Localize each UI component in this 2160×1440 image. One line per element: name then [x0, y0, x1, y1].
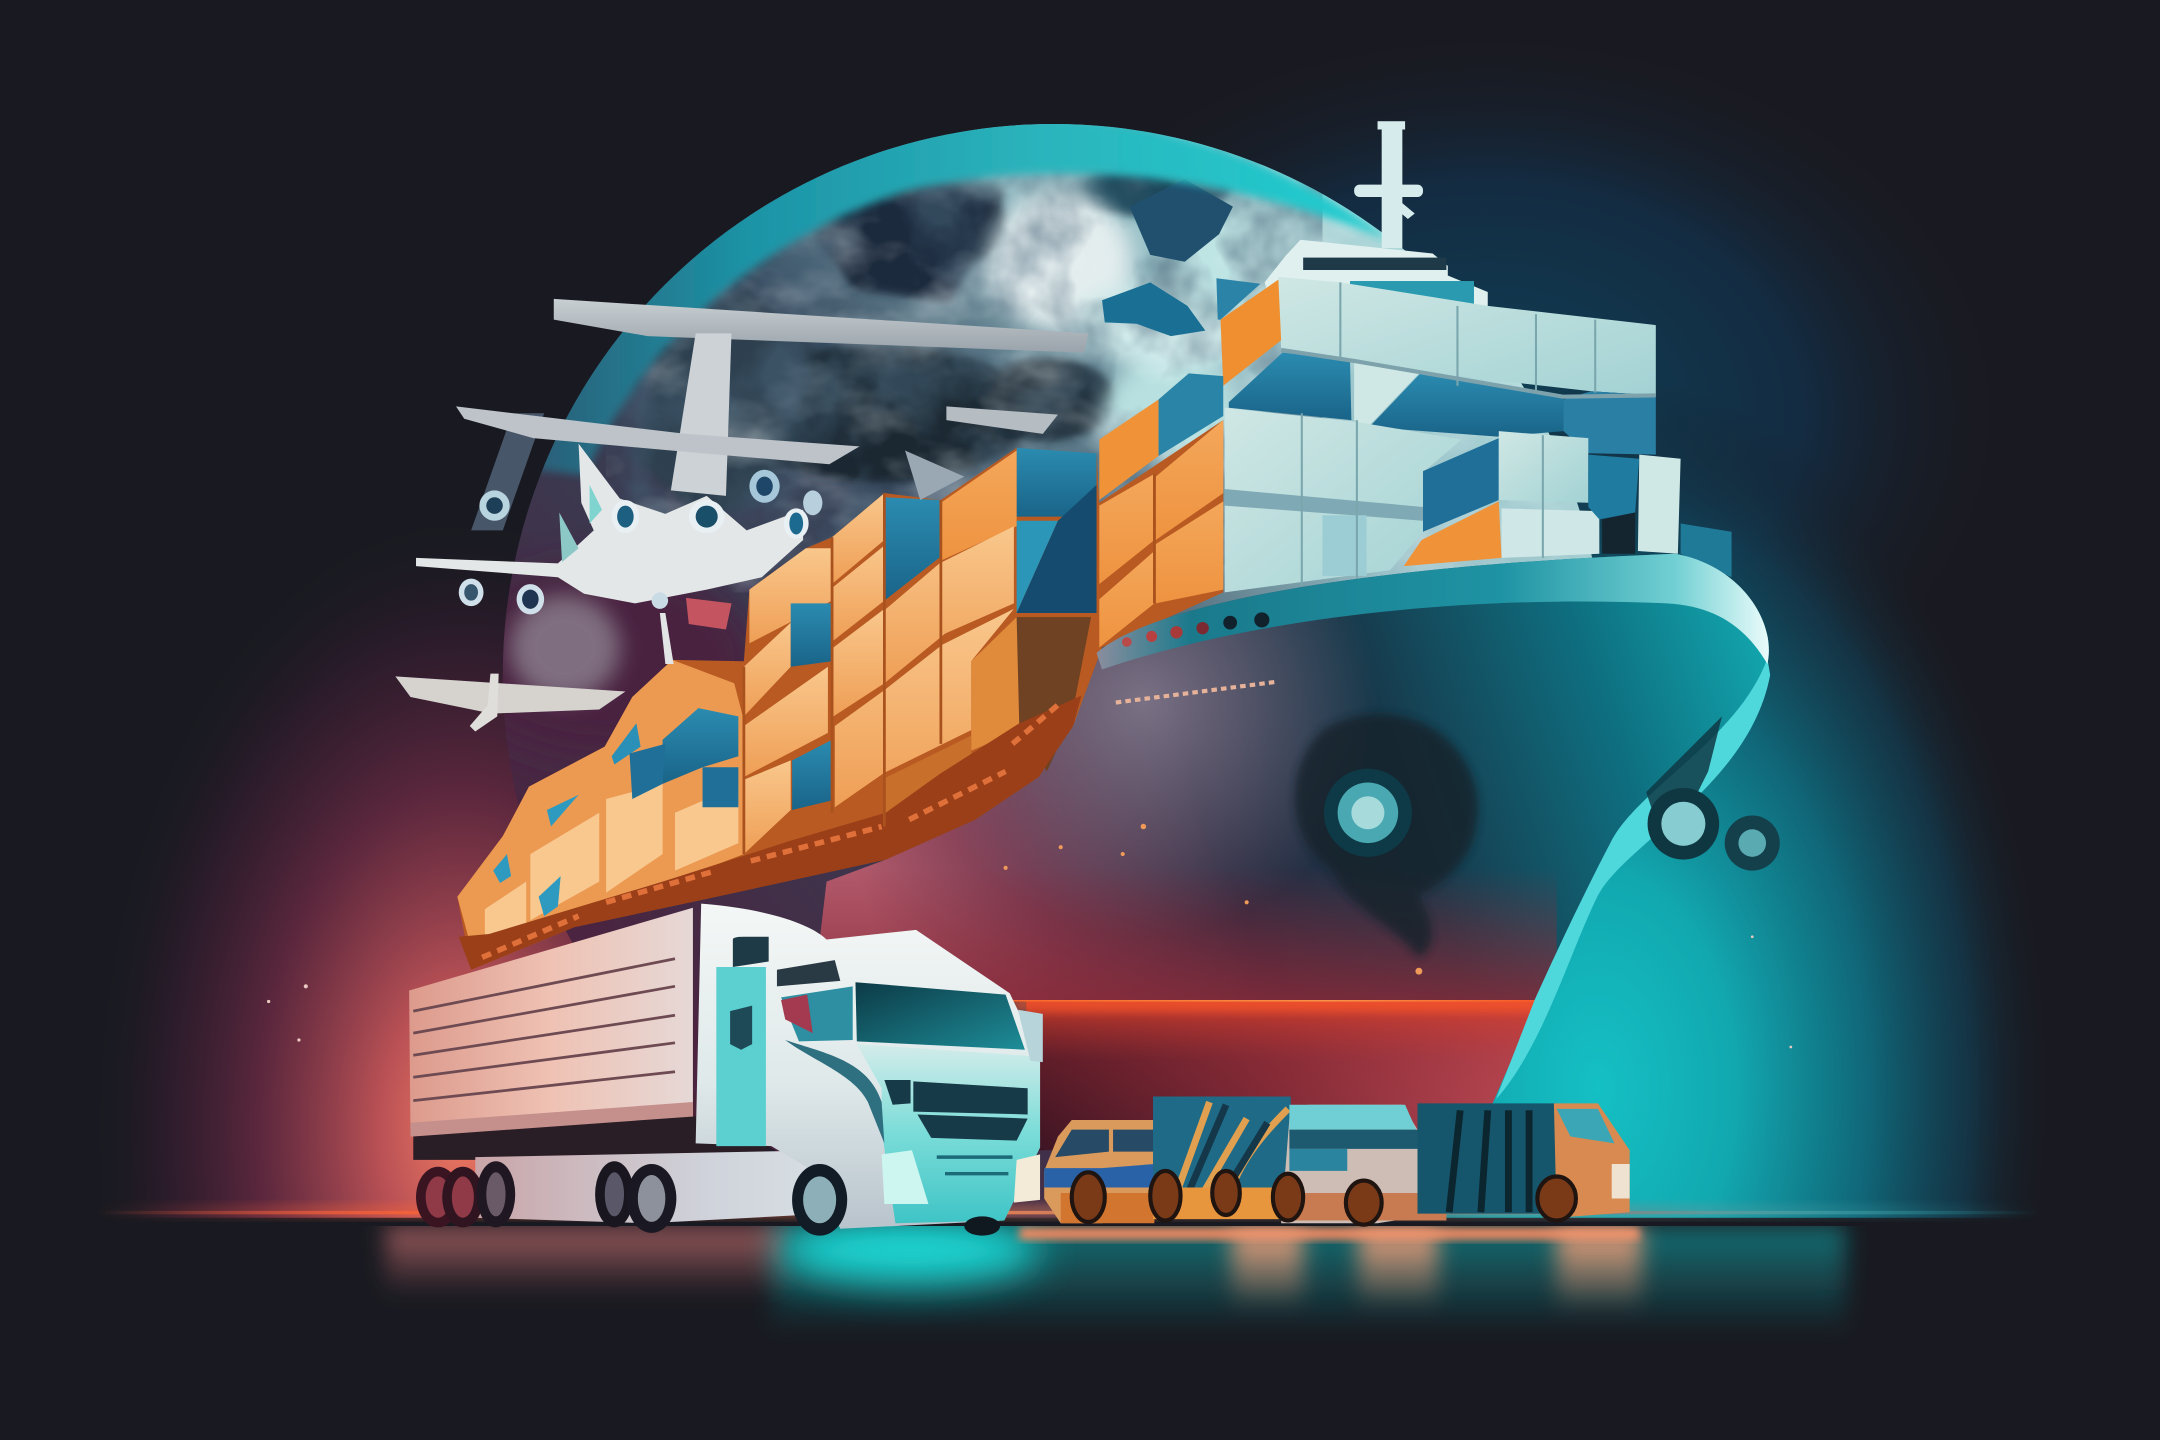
truck cab front: [857, 1044, 1040, 1223]
truck 2 container: [1153, 1097, 1302, 1219]
cargo dark base: [457, 420, 1223, 970]
plane wing right small: [946, 406, 1058, 434]
truck swoosh: [785, 1040, 884, 1143]
red glow left: [0, 0, 1240, 1223]
rear lower orange: [1099, 474, 1154, 584]
ship mast: [1354, 121, 1423, 248]
globe dark land masses: [640, 170, 1235, 512]
rear upper blue: [1159, 373, 1223, 456]
truck chassis silver: [475, 1150, 854, 1223]
big pale block: [1225, 408, 1462, 592]
hull sparks: [1004, 824, 1422, 975]
truck bumper slats: [937, 1157, 1012, 1174]
ground line: [96, 1204, 2039, 1218]
blue right block: [1564, 391, 1656, 455]
globe teal rim: [523, 115, 1391, 475]
globe dark texture: [623, 159, 1322, 565]
globe clouds: [943, 169, 1303, 470]
dark gap: [1602, 512, 1635, 554]
van 3: [1281, 1105, 1446, 1223]
blue glow behind ship: [0, 0, 2160, 882]
small wheels: [1072, 1171, 1576, 1225]
plane large wing top: [554, 299, 1088, 353]
hull body: [813, 544, 1791, 1006]
blue stack: [1017, 448, 1097, 517]
orange columns: [941, 450, 1017, 561]
top orange: [1221, 280, 1281, 386]
pale wedge: [1354, 361, 1422, 427]
front cargo mass: [457, 660, 744, 957]
truck side window: [781, 986, 853, 1041]
small trucks group: [1044, 1097, 1630, 1225]
truck windscreen: [855, 982, 1025, 1050]
scattered particles: [267, 935, 1792, 1048]
truck grille: [913, 1081, 1028, 1114]
truck trailer: [409, 908, 693, 1136]
van 1: [1044, 1120, 1157, 1223]
truck mirror: [1018, 1010, 1043, 1062]
hull portholes: [1116, 612, 1276, 703]
truck upper side window: [777, 960, 840, 986]
truck vents: [733, 937, 769, 967]
hull thruster right: [1646, 716, 1780, 871]
blue row: [1229, 353, 1351, 420]
truck 4 container: [1418, 1103, 1630, 1218]
pale block middle: [1499, 431, 1588, 503]
plane fuselage upper: [671, 333, 731, 496]
orange containers cargo: [457, 373, 1223, 970]
plane lower small: [395, 613, 674, 731]
reflection streaks: [1232, 1229, 1642, 1311]
red tag debris: [686, 598, 731, 630]
horizon glow line: [1012, 985, 1543, 1013]
truck: [409, 904, 1043, 1236]
globe: [455, 115, 1605, 1226]
bow bright edge: [1496, 658, 1770, 1099]
illustration: global logistics scene: [104, 104, 2027, 1324]
pale containers upper stack: [1216, 277, 1732, 592]
plane tail accent: [590, 485, 602, 523]
plane grey tail fragment: [905, 450, 964, 500]
brown interior: [1012, 617, 1091, 771]
truck teal stripe: [716, 967, 766, 1146]
small orange block: [1404, 501, 1502, 566]
plane engines: [459, 470, 822, 614]
container seams: [744, 474, 1154, 854]
reflection mauve left: [386, 1226, 785, 1295]
hull thruster left: [1295, 714, 1478, 957]
globe lower left maroon fade: [503, 575, 748, 752]
cargo underside frame: [459, 696, 1081, 970]
sea and horizon: [1012, 985, 1543, 1150]
truck wheels: [416, 1161, 1000, 1236]
column 540 to 604: [749, 548, 832, 643]
blue diagonal block: [1423, 438, 1499, 532]
rear upper orange: [1099, 399, 1159, 500]
pale block lower: [1502, 508, 1599, 558]
plane main body: [416, 444, 803, 603]
ground reflections: [372, 1226, 1858, 1324]
truck cab: [696, 904, 1040, 1229]
blue lower right: [1588, 455, 1639, 519]
globe grey haze: [510, 595, 620, 700]
truck chassis dark: [413, 1116, 771, 1160]
airplanes: [395, 299, 1088, 731]
top blue corner: [1216, 278, 1260, 320]
reflection orange band: [1019, 1227, 1639, 1240]
pale tall block: [1638, 455, 1681, 554]
front cargo blue panels: [663, 708, 738, 784]
ship deck band: [1097, 554, 1769, 669]
truck headlights: [882, 1150, 928, 1204]
ship: [813, 121, 1791, 1099]
bridge superstructure: [1265, 240, 1488, 311]
plane second wing: [456, 406, 860, 464]
blue middle row: [1369, 372, 1564, 437]
plane left pod: [471, 413, 544, 530]
top pale row: [1278, 277, 1656, 395]
globe continents right: [1102, 179, 1233, 336]
globe cloud texture: [606, 124, 1570, 592]
reflection teal under truck: [778, 1218, 1040, 1284]
blue far right block: [1681, 523, 1732, 577]
ground band: [0, 1218, 2160, 1440]
reflection base: [771, 1226, 1846, 1333]
